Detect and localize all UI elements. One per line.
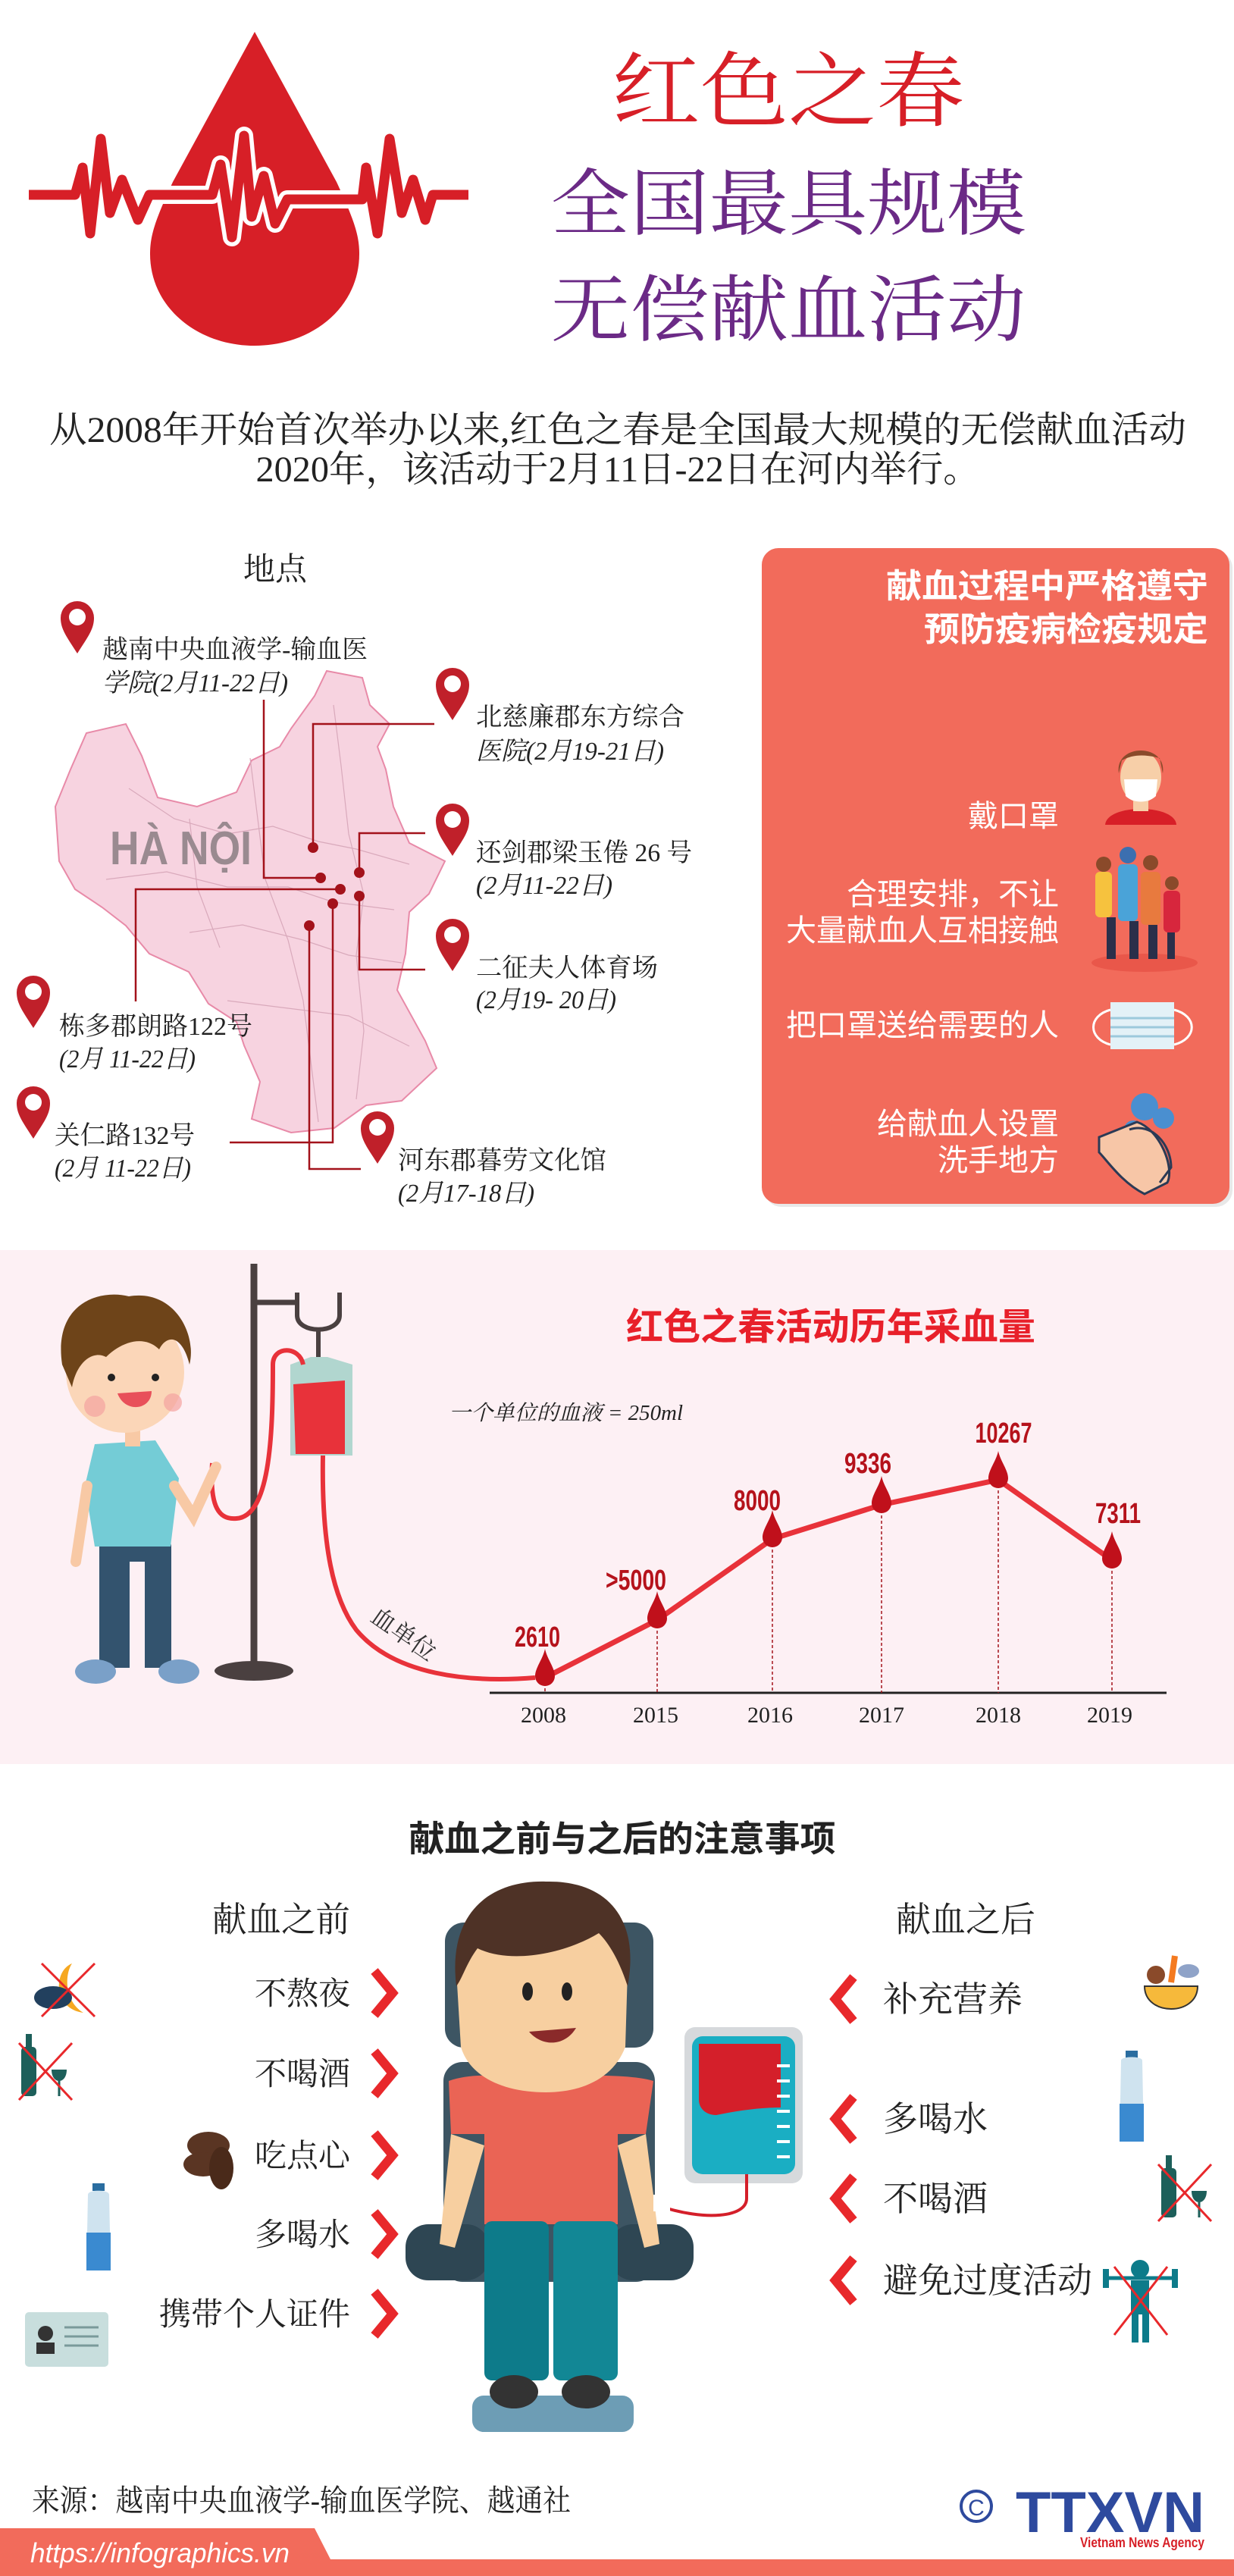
panel: epidemic prevention rules: 预防疫病检疫规定 bbox=[924, 611, 1208, 648]
chart note: 一个单位的血液 = 250ml bbox=[449, 1402, 683, 1425]
icon: food bowl bbox=[1145, 1956, 1199, 2009]
source text: 来源：越南中央血液学-输血医学院、越通社 bbox=[32, 2484, 571, 2518]
before list: 不喝酒 bbox=[255, 2057, 350, 2092]
location labels with pins: 关仁路132号 bbox=[55, 1121, 195, 1150]
location labels with pins: (2月11-22日) bbox=[476, 872, 612, 900]
after list: 不喝酒 bbox=[883, 2180, 988, 2218]
title: 全国最具规模 bbox=[550, 164, 1026, 245]
icon: water bottle bbox=[86, 2183, 111, 2270]
panel: epidemic prevention rules: 戴口罩 bbox=[968, 800, 1059, 833]
chevrons after bbox=[835, 1977, 853, 2302]
location labels with pins: 栋多郡朗路122号 bbox=[59, 1012, 252, 1041]
before list bbox=[159, 1976, 352, 2333]
icon: weightlifter crossed bbox=[1103, 2260, 1178, 2343]
location labels with pins: 北慈廉郡东方综合 bbox=[476, 703, 684, 732]
line chart: 10267 bbox=[975, 1418, 1032, 1449]
icon: moon and cloud crossed bbox=[34, 1963, 95, 2017]
title: 无偿献血活动 bbox=[550, 270, 1026, 351]
icon: crowd bbox=[1091, 847, 1198, 972]
intro text: 2020年，该活动于2月11日-22日在河内举行。 bbox=[256, 450, 979, 490]
line chart: 2610 bbox=[515, 1622, 560, 1653]
before list: 多喝水 bbox=[255, 2218, 350, 2253]
footer bar with URL bbox=[0, 2528, 1234, 2576]
column heads: 献血之前 bbox=[212, 1901, 350, 1939]
location labels with pins: 还剑郡梁玉倦 26 号 bbox=[476, 838, 692, 867]
panel: epidemic prevention rules: 献血过程中严格遵守 bbox=[886, 568, 1208, 605]
logo: TTXVN: Vietnam News Agency bbox=[1080, 2535, 1204, 2550]
icon: water bottle bbox=[1120, 2051, 1144, 2142]
location labels with pins bbox=[17, 601, 692, 1208]
line chart: >5000 bbox=[606, 1565, 666, 1597]
panel: epidemic prevention rules: 合理安排，不让 bbox=[847, 878, 1059, 911]
illustration: boy with IV pole and blood bag bbox=[61, 1264, 535, 1684]
panel: epidemic prevention rules bbox=[762, 548, 1232, 1207]
line chart: 2018 bbox=[976, 1703, 1021, 1728]
line chart: 2017 bbox=[859, 1703, 904, 1728]
before list: 不熬夜 bbox=[255, 1976, 350, 2012]
location labels with pins: 二征夫人体育场 bbox=[476, 954, 658, 982]
before list: 吃点心 bbox=[255, 2139, 352, 2174]
icons: after bbox=[1103, 1956, 1211, 2343]
icons: before bbox=[19, 1963, 233, 2367]
before list: 携带个人证件 bbox=[159, 2298, 350, 2333]
line chart: 7311 bbox=[1095, 1498, 1141, 1530]
line chart: 2016 bbox=[747, 1703, 793, 1728]
map of Hanoi: HÀ NỘI bbox=[110, 823, 252, 875]
panel: epidemic prevention rules: 大量献血人互相接触 bbox=[786, 914, 1059, 948]
after list bbox=[883, 1980, 1092, 2300]
title: 红色之春 bbox=[612, 48, 964, 138]
panel: epidemic prevention rules: 洗手地方 bbox=[938, 1144, 1059, 1177]
illustration: boy with IV pole and blood bag: 血单位 bbox=[366, 1602, 441, 1666]
illustration: man seated in chair bbox=[406, 1882, 694, 2432]
line chart: 8000 bbox=[734, 1485, 781, 1517]
location labels with pins: (2月19- 20日) bbox=[476, 986, 616, 1014]
location labels with pins: 学院(2月11-22日) bbox=[102, 669, 288, 697]
heading: locations: 地点 bbox=[243, 553, 308, 588]
footer bar with URL: https://infographics.vn bbox=[30, 2537, 290, 2568]
line chart: 2008 bbox=[521, 1703, 566, 1728]
line chart: 2019 bbox=[1087, 1703, 1132, 1728]
after list: 补充营养 bbox=[883, 1980, 1023, 2019]
location labels with pins: (2月17-18日) bbox=[398, 1180, 534, 1208]
logo: TTXVN: C bbox=[968, 2496, 985, 2521]
intro text bbox=[49, 410, 1186, 490]
boy bbox=[99, 1539, 171, 1668]
icon: wine crossed bbox=[19, 2034, 72, 2100]
line chart bbox=[490, 1418, 1167, 1728]
map leader lines and dots bbox=[136, 700, 434, 1169]
location labels with pins: (2月 11-22日) bbox=[55, 1155, 191, 1183]
after list: 多喝水 bbox=[883, 2100, 988, 2139]
location labels with pins: 河东郡暮劳文化馆 bbox=[398, 1146, 606, 1175]
location labels with pins: 越南中央血液学-输血医 bbox=[102, 635, 368, 664]
panel: yearly blood collection chart background bbox=[0, 1250, 1234, 1764]
icon: wine crossed bbox=[1158, 2155, 1211, 2221]
location labels with pins: 医院(2月19-21日) bbox=[476, 738, 664, 766]
icon: washing hands bbox=[1099, 1093, 1174, 1194]
intro text: 从2008年开始首次举办以来,红色之春是全国最大规模的无偿献血活动 bbox=[49, 410, 1186, 450]
column heads: 献血之后 bbox=[896, 1901, 1035, 1939]
heading: notes before and after: 献血之前与之后的注意事项 bbox=[409, 1819, 835, 1859]
icon: cookies bbox=[183, 2132, 233, 2189]
line chart: 2015 bbox=[633, 1703, 678, 1728]
icon: face mask bbox=[1093, 1002, 1192, 1049]
illustration: blood bag right bbox=[653, 2027, 803, 2215]
panel: epidemic prevention rules: 给献血人设置 bbox=[877, 1108, 1059, 1141]
map of Hanoi bbox=[55, 671, 445, 1133]
title bbox=[550, 48, 1026, 351]
line chart: 9336 bbox=[844, 1448, 891, 1480]
chart title: 红色之春活动历年采血量 bbox=[626, 1307, 1035, 1348]
icon: ID card bbox=[25, 2312, 108, 2367]
location labels with pins: (2月 11-22日) bbox=[59, 1045, 196, 1073]
chevrons before bbox=[374, 1971, 393, 2336]
icon: masked person bbox=[1105, 751, 1176, 825]
logo: TTXVN: TTXVN bbox=[1016, 2480, 1204, 2545]
logo: blood drop with heartbeat bbox=[29, 32, 468, 346]
after list: 避免过度活动 bbox=[883, 2261, 1092, 2300]
column heads bbox=[212, 1901, 1035, 1939]
panel: epidemic prevention rules: 把口罩送给需要的人 bbox=[786, 1009, 1059, 1042]
